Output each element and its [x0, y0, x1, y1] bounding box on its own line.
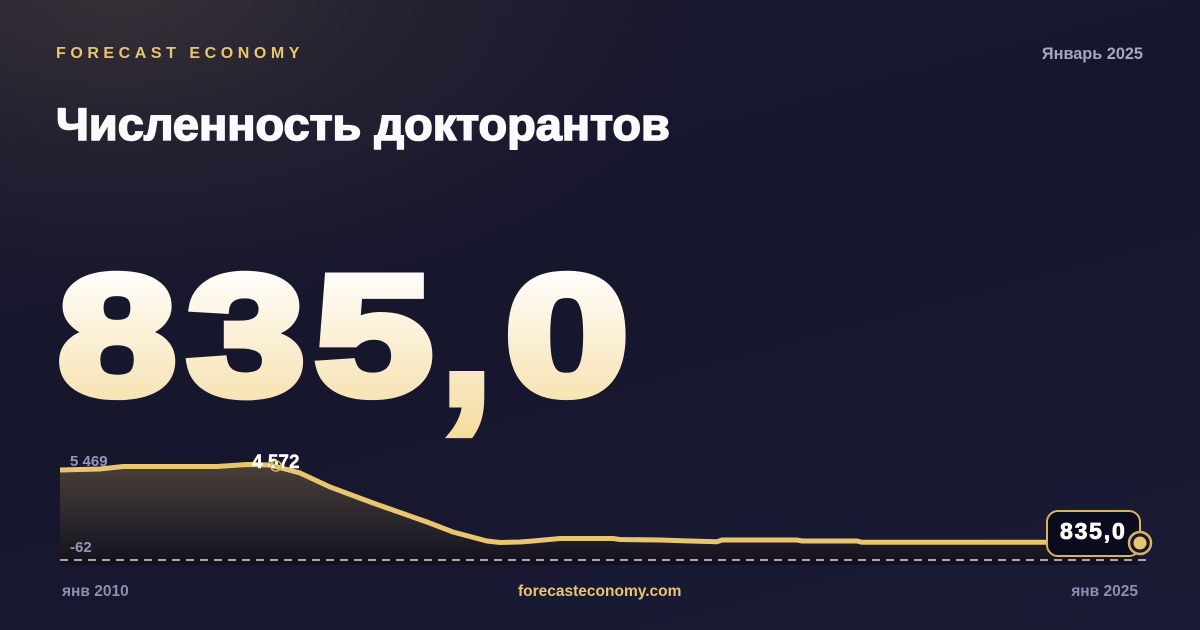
big value: , — [439, 225, 494, 446]
website: forecasteconomy.com — [518, 583, 681, 600]
current value callout: 835,0 — [1060, 518, 1127, 544]
date: Январь 2025 — [1042, 45, 1143, 63]
big value: 0 — [505, 240, 629, 430]
min axis label: -62 — [70, 539, 92, 556]
big value: 835 — [58, 240, 433, 430]
start date: янв 2010 — [62, 583, 129, 600]
current value callout — [1047, 511, 1140, 556]
brand label: FORECAST ECONOMY — [56, 45, 304, 62]
baseline — [60, 559, 1146, 561]
chart line — [60, 464, 1050, 542]
title: Численность докторантов — [56, 99, 670, 150]
end date: янв 2025 — [1071, 583, 1138, 600]
peak value: 4 572 — [252, 452, 300, 473]
peak marker — [271, 461, 281, 471]
chart area — [60, 464, 1140, 565]
max axis label: 5 469 — [70, 453, 108, 470]
current value marker — [1129, 532, 1151, 554]
